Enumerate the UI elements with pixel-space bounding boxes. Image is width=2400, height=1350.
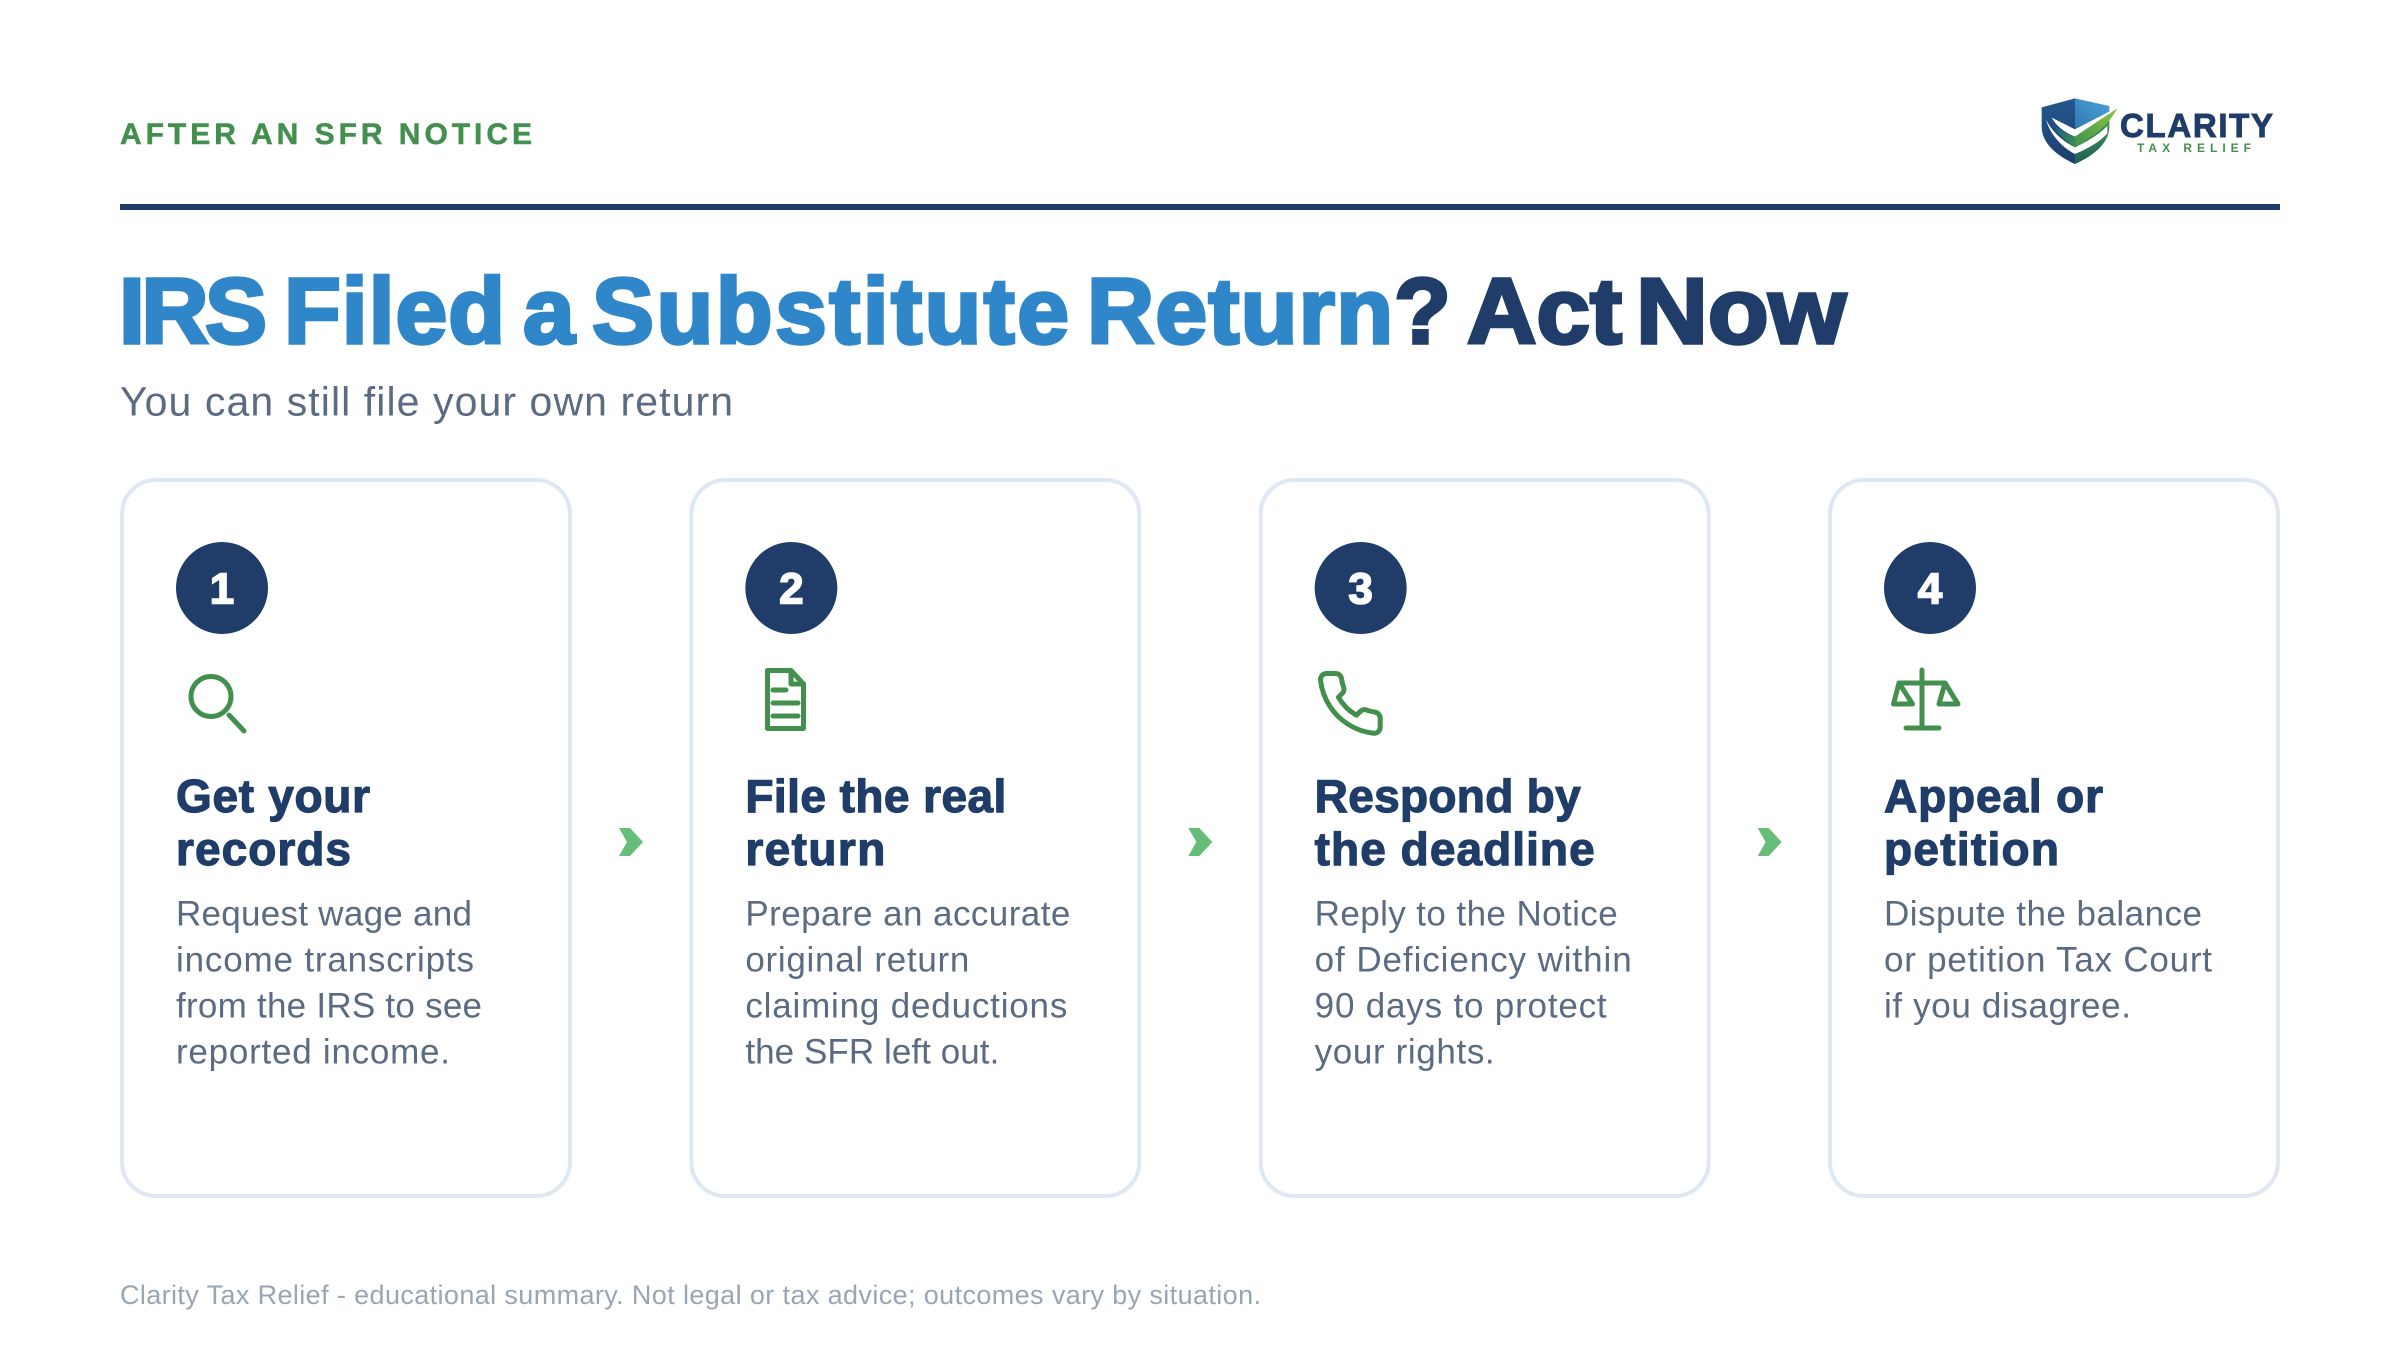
description: Request wage and bbox=[176, 894, 472, 934]
heading bbox=[1315, 770, 1595, 875]
heading: return bbox=[745, 823, 885, 875]
arrow 2 bbox=[1188, 828, 1212, 856]
description: Reply to the Notice bbox=[1315, 894, 1618, 934]
heading: Get your bbox=[176, 770, 370, 822]
panel: step 4 bbox=[1830, 480, 2278, 1196]
description: the SFR left out. bbox=[745, 1032, 999, 1072]
description bbox=[176, 894, 482, 1072]
heading bbox=[176, 770, 370, 875]
footer disclaimer: Clarity Tax Relief - educational summary. Not legal or tax advice; outcomes vary by situation. bbox=[120, 1280, 1261, 1310]
icon: document bbox=[768, 670, 804, 728]
heading: File the real bbox=[745, 770, 1006, 822]
heading: Respond by bbox=[1315, 770, 1581, 822]
description: income transcripts bbox=[176, 940, 474, 980]
step number 1 bbox=[176, 542, 268, 634]
description bbox=[1884, 894, 2212, 1026]
logo tagline: TAX RELIEF bbox=[2137, 141, 2251, 155]
icon: phone bbox=[1321, 673, 1380, 733]
header rule bbox=[120, 204, 2280, 210]
step number 2: 2 bbox=[779, 564, 804, 614]
subtitle: You can still file your own return bbox=[120, 378, 733, 424]
description: your rights. bbox=[1315, 1032, 1495, 1072]
step number 2 bbox=[745, 542, 837, 634]
title: ? bbox=[1394, 259, 1451, 363]
description: claiming deductions bbox=[745, 986, 1067, 1026]
description: Dispute the balance bbox=[1884, 894, 2202, 934]
heading bbox=[745, 770, 1006, 875]
icon: scales bbox=[1894, 670, 1958, 728]
title: a bbox=[523, 259, 576, 363]
panel: step 3 bbox=[1261, 480, 1709, 1196]
title: Filed bbox=[284, 259, 505, 363]
heading: Appeal or bbox=[1884, 770, 2103, 822]
panel: step 2 bbox=[691, 480, 1139, 1196]
description: reported income. bbox=[176, 1032, 450, 1072]
description bbox=[745, 894, 1070, 1072]
description: from the IRS to see bbox=[176, 986, 482, 1026]
description: of Deficiency within bbox=[1315, 940, 1632, 980]
heading: the deadline bbox=[1315, 823, 1595, 875]
title: Substitute bbox=[592, 259, 1069, 363]
description bbox=[1315, 894, 1632, 1072]
panel: step 1 bbox=[122, 480, 570, 1196]
description: Prepare an accurate bbox=[745, 894, 1070, 934]
step number 4 bbox=[1884, 542, 1976, 634]
heading bbox=[1884, 770, 2103, 875]
title bbox=[119, 259, 1847, 363]
arrow 3 bbox=[1758, 828, 1782, 856]
description: original return bbox=[745, 940, 969, 980]
step number 3: 3 bbox=[1348, 564, 1373, 614]
arrow 1 bbox=[619, 828, 643, 856]
logo wordmark: CLARITY bbox=[2120, 107, 2273, 144]
title: Now bbox=[1636, 259, 1847, 363]
description: if you disagree. bbox=[1884, 986, 2131, 1026]
heading: petition bbox=[1884, 823, 2059, 875]
description: or petition Tax Court bbox=[1884, 940, 2212, 980]
title: Act bbox=[1467, 259, 1622, 363]
description: 90 days to protect bbox=[1315, 986, 1607, 1026]
heading: records bbox=[176, 823, 351, 875]
eyebrow label: AFTER AN SFR NOTICE bbox=[120, 118, 532, 151]
step number 3 bbox=[1315, 542, 1407, 634]
title: Return bbox=[1087, 259, 1393, 363]
step number 1: 1 bbox=[210, 564, 234, 614]
step number 4: 4 bbox=[1918, 564, 1943, 614]
logo shield bbox=[2042, 98, 2117, 164]
icon: magnifying glass bbox=[191, 676, 244, 731]
logo: Clarity Tax Relief bbox=[2042, 98, 2273, 164]
title: IRS bbox=[119, 259, 267, 363]
